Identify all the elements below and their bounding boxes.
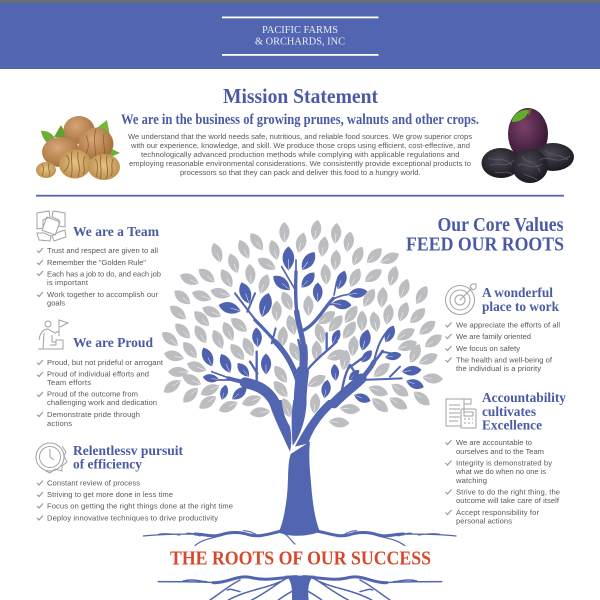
- trunk: [268, 400, 342, 536]
- icon: walnuts: [36, 116, 120, 180]
- icon: joined hands: [37, 211, 66, 241]
- trunk and roots: [143, 400, 456, 600]
- bullet list: Work together to accomplish our: [47, 290, 158, 299]
- panel: we are a team: [37, 211, 161, 308]
- heading: place to work: [482, 300, 559, 315]
- icon: plum and prunes: [482, 108, 574, 183]
- header band: & ORCHARDS, INC: [255, 36, 345, 48]
- bullet list: We focus on safety: [456, 344, 520, 353]
- mission statement heading: Mission Statement: [223, 84, 379, 108]
- divider: [36, 195, 564, 197]
- bullet list: Focus on getting the right things done at the right time: [47, 502, 233, 510]
- heading: cultivates: [482, 405, 537, 420]
- heading: We are a Team: [73, 225, 159, 240]
- heading: [482, 286, 559, 315]
- bullet list: Trust and respect are given to all: [47, 246, 158, 255]
- bullet list: We are family oriented: [456, 332, 531, 341]
- branches: [212, 260, 402, 405]
- bullet list: goals: [47, 298, 65, 308]
- heading: A wonderful: [482, 286, 553, 301]
- bullet list: is important: [47, 278, 89, 287]
- bullet list: The health and well-being of: [456, 356, 553, 364]
- bullet list: Integrity is demonstrated by: [456, 458, 552, 468]
- heading: Relentlessv pursuit: [73, 444, 183, 459]
- mission body text: We understand that the world needs safe, nutritious, and reliable food sources. We grow superior crops: [128, 132, 472, 141]
- icon: clock gear: [36, 443, 67, 473]
- bullet list: Remember the "Golden Rule": [47, 258, 146, 267]
- bullet list: [446, 320, 560, 373]
- core values heading: [406, 215, 564, 256]
- mission body text: employing reasonable environmental considerations. We consistently provide exceptional products to: [129, 159, 471, 168]
- panel: relentless pursuit of efficiency: [36, 443, 233, 522]
- heading: [482, 391, 566, 434]
- bullet list: Proud of individual efforts and: [47, 370, 149, 378]
- mission body text: with our experience, knowledge, and skill. We produce those crops using efficient, cost-effective, and: [130, 141, 470, 150]
- bullet list: outcome will take care of itself: [456, 496, 560, 505]
- bullet list: Constant review of process: [47, 478, 140, 488]
- heading: of efficiency: [73, 458, 142, 472]
- bullet list: Accept responsibility for: [456, 508, 539, 517]
- bullet list: We appreciate the efforts of all: [456, 320, 560, 330]
- panel: we are proud: [37, 320, 164, 428]
- bullet list: Deploy innovative techniques to drive productivity: [47, 514, 218, 522]
- bullet list: Team efforts: [47, 378, 91, 387]
- heading: Excellence: [482, 418, 542, 434]
- bullet list: [37, 246, 161, 308]
- mission subtitle: We are in the business of growing prunes, walnuts and other crops.: [121, 112, 479, 128]
- header band: PACIFIC FARMS: [262, 25, 338, 36]
- core values heading: Our Core Values: [438, 215, 564, 236]
- bullet list: We are accountable to: [456, 438, 532, 447]
- mission body text: processors so that they can pack and deliver this food to a hungry world.: [180, 168, 420, 177]
- heading: Accountability: [482, 391, 566, 406]
- roots title: THE ROOTS OF OUR SUCCESS: [170, 548, 431, 570]
- panel: a wonderful place to work: [446, 284, 560, 373]
- heading: We are Proud: [73, 336, 153, 351]
- bullet list: actions: [47, 419, 72, 428]
- mission body text: [128, 132, 472, 177]
- bullet list: Strive to do the right thing, the: [456, 488, 560, 496]
- bullet list: watching: [455, 476, 487, 485]
- icon: target with arrow: [446, 284, 476, 314]
- mission body text: technologically advanced production methods while complying with applicable regulations and: [141, 150, 460, 159]
- bullet list: Proud of the outcome from: [47, 390, 138, 398]
- panel: accountability cultivates excellence: [446, 391, 566, 526]
- bullet list: challenging work and dedication: [47, 398, 157, 407]
- heading: [73, 444, 183, 472]
- bullet list: [37, 358, 164, 428]
- core values heading: FEED OUR ROOTS: [406, 234, 564, 256]
- bullet list: ourselves and to the Team: [456, 447, 544, 456]
- bullet list: Each has a job to do, and each job: [47, 270, 161, 278]
- icon: person with flag: [38, 320, 68, 349]
- bullet list: Demonstrate pride through: [47, 410, 140, 419]
- icon: document and calculator: [446, 399, 476, 428]
- roots: [143, 531, 456, 600]
- bullet list: [37, 478, 233, 522]
- bullet list: [446, 438, 560, 526]
- bullet list: what we do when no one is: [455, 467, 546, 476]
- bullet list: Proud, but not prideful or arrogant: [47, 358, 164, 367]
- header band: [0, 0, 600, 69]
- bullet list: the individual is a priority: [456, 364, 541, 373]
- blue leaves: [199, 246, 425, 405]
- tree canopy and branches: [159, 219, 445, 428]
- bullet list: Striving to get more done in less time: [47, 490, 173, 499]
- bullet list: personal actions: [456, 516, 512, 526]
- grey leaves: [159, 219, 445, 428]
